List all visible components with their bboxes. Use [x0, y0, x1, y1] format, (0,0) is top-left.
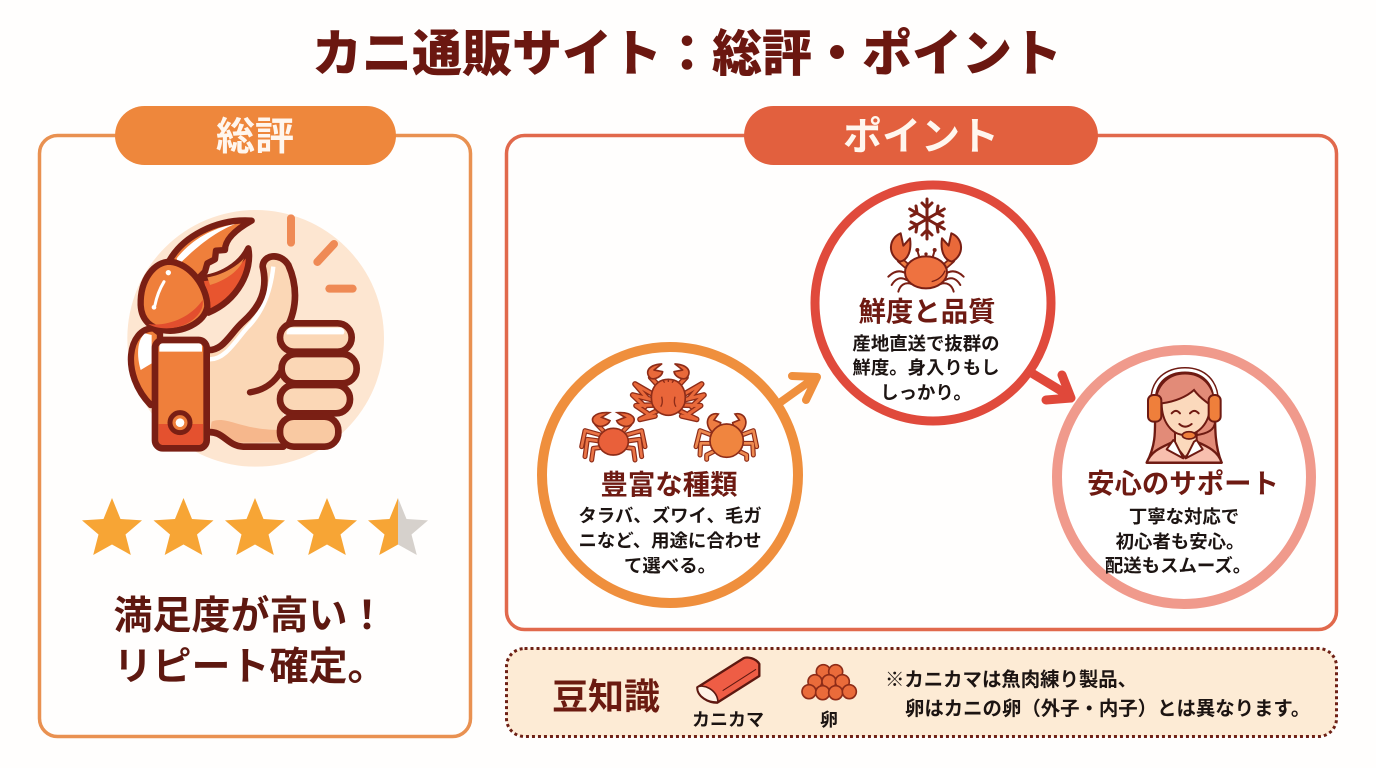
point title: support: 安心のサポート	[1087, 468, 1279, 499]
note text: ※カニカマは魚肉練り製品、	[885, 668, 1137, 691]
heading pill: points	[744, 106, 1098, 165]
icon: crab claw thumbs up	[127, 210, 384, 467]
icon: snow crab	[633, 364, 704, 419]
point description: support: 配送もスムーズ。	[1105, 555, 1251, 576]
heading: trivia: 豆知識	[552, 676, 660, 717]
point description: variety: て選べる。	[624, 555, 716, 576]
review summary text	[113, 595, 387, 689]
review summary text: 満足度が高い！	[113, 595, 387, 638]
point description: support: 初心者も安心。	[1116, 531, 1244, 552]
icon: fresh crab	[888, 233, 964, 292]
point description: freshness: しっかり。	[880, 382, 972, 403]
point description: support: 丁寧な対応で	[1129, 506, 1239, 527]
title: カニ通販サイト：総評・ポイント	[312, 26, 1062, 82]
note text: 卵はカニの卵（外子・内子）とは異なります。	[905, 698, 1310, 720]
icon: support operator	[1147, 370, 1222, 463]
label: roe: 卵	[820, 710, 838, 730]
icon: snowflake	[910, 199, 944, 239]
star rating: 4.5 of 5	[82, 498, 428, 555]
point description: variety: タラバ、ズワイ、毛ガ	[578, 505, 762, 526]
heading pill: overall review: 総評	[216, 116, 294, 159]
point description: variety	[578, 505, 762, 576]
heading pill: points: ポイント	[843, 116, 999, 159]
point title: variety: 豊富な種類	[601, 469, 737, 500]
panel: overall review	[40, 106, 470, 736]
label: crab stick: カニカマ	[692, 710, 764, 730]
review summary text: リピート確定。	[113, 646, 387, 689]
point description: freshness: 鮮度。身入りもし	[852, 357, 1000, 378]
point description: variety: ニなど、用途に合わせ	[578, 530, 762, 551]
arrow: freshness to support	[1030, 372, 1071, 400]
note text	[885, 668, 1310, 720]
icon: hairy crab	[696, 414, 757, 459]
point circle: freshness	[815, 185, 1051, 421]
icon: roe	[802, 665, 856, 700]
arrow: variety to freshness	[778, 376, 817, 404]
point title: freshness: 鮮度と品質	[859, 296, 995, 327]
point circle: support	[1057, 350, 1311, 604]
point description: freshness	[852, 333, 1000, 403]
icon: tanner crab	[582, 413, 645, 460]
point description: support	[1105, 506, 1251, 576]
point circle: variety	[542, 347, 798, 603]
icon: crab stick	[697, 658, 759, 703]
heading pill: overall review	[115, 106, 396, 165]
panel: points	[506, 106, 1336, 630]
point description: freshness: 産地直送で抜群の	[852, 333, 1000, 354]
panel: trivia note	[506, 648, 1336, 736]
